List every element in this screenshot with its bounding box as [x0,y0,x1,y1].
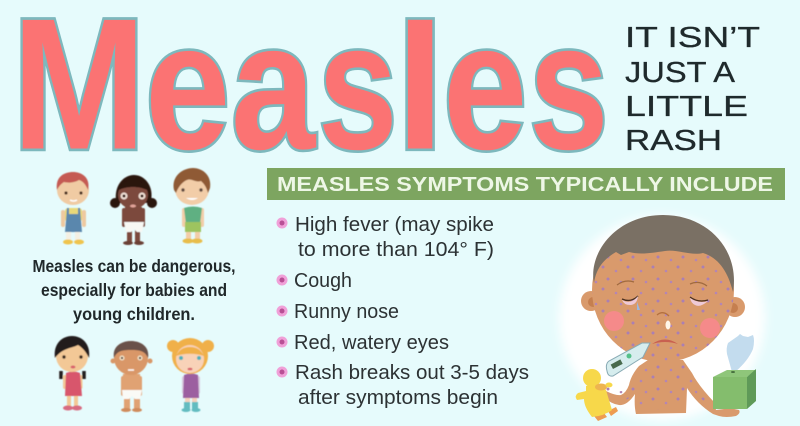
eyes [617,281,708,301]
warning text: especially for babies and [41,280,227,300]
bullet: red watery eyes: Red, watery eyes [294,331,449,354]
warning text: Measles can be dangerous, [32,256,236,276]
icon: child in white diaper [110,175,157,245]
bullet: rash: after symptoms begin [298,386,498,409]
subtitle: IT ISN’T [625,22,760,54]
hair [593,215,734,292]
rash spots [592,218,734,362]
thermometer [606,343,650,376]
bullet: rash [276,361,529,409]
icon: blonde child in purple dress [167,338,214,412]
panel: symptoms heading [267,168,785,200]
subtitle: LITTLE [625,91,748,123]
tear [637,302,640,310]
warning text: young children. [73,304,195,324]
subtitle: JUST A [625,57,736,89]
icon: child in green shirt [174,168,210,244]
title [12,0,609,188]
subtitle: RASH [625,125,722,157]
mouth [652,340,678,344]
icon: tissue box [713,334,756,409]
icon: child in blue overalls [57,172,89,244]
subtitle [625,22,760,157]
cheeks [604,311,624,331]
bullet: high fever: to more than 104° F) [298,238,494,261]
illustration: sick child [559,215,765,421]
icon: rubber duck [576,369,618,421]
bullet: cough: Cough [294,269,352,292]
bullet: high fever: High fever (may spike [295,213,494,236]
warning text [32,256,236,324]
ears [581,291,601,311]
bullet: rash: Rash breaks out 3-5 days [295,361,529,384]
panel: symptoms heading: MEASLES SYMPTOMS TYPICALLY INCLUDE [277,173,773,196]
icon: child with black pigtails [55,336,89,410]
icon: child with short hair and diaper [110,341,152,412]
symptoms list [276,213,529,409]
white glow [559,216,765,420]
bullet: runny nose: Runny nose [294,300,399,323]
head [592,218,734,362]
bullet: high fever [276,213,494,261]
child body [604,360,740,417]
nose [657,313,669,316]
